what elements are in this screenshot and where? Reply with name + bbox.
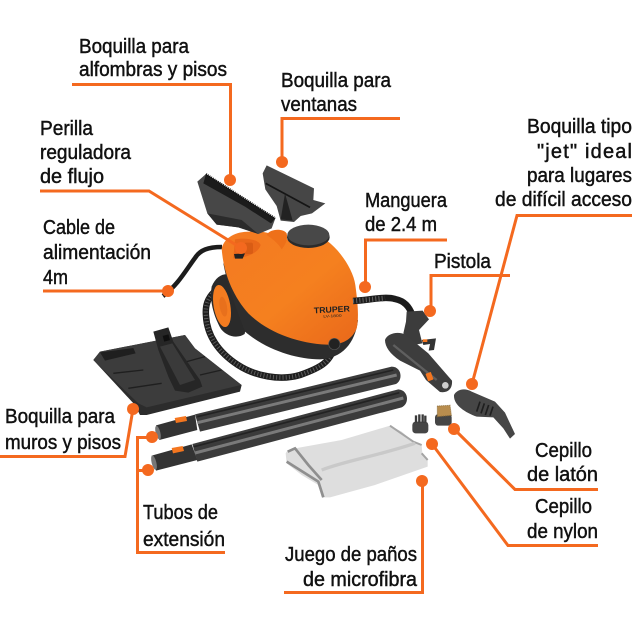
callout: extension tubes (138, 431, 225, 552)
brand label: LV-1800 (323, 314, 342, 319)
power cord (163, 247, 222, 296)
callout: carpet nozzle: alfombras y pisos (79, 59, 227, 81)
callout: power cord: Cable de (43, 217, 115, 239)
callout: microfiber cloths: Juego de paños (285, 544, 417, 566)
steam cleaner unit (163, 165, 412, 378)
callout: wall nozzle (0, 403, 139, 456)
callout: jet nozzle: para lugares (527, 165, 632, 187)
callout: extension tubes: extensión (143, 529, 225, 551)
extension tubes (150, 367, 407, 471)
nylon brush (412, 414, 428, 433)
callout: brass brush: Cepillo (535, 440, 592, 462)
hose outlet (329, 338, 340, 350)
callout: hose: Manguera (365, 190, 448, 212)
carpet nozzle (197, 174, 275, 234)
callout: nylon brush: de nylon (527, 521, 598, 543)
callout: nylon brush (426, 438, 598, 546)
water cap (287, 225, 330, 248)
base (223, 263, 358, 359)
callout: jet nozzle: Boquilla tipo (527, 116, 632, 138)
callout: window nozzle: ventanas (281, 94, 357, 116)
window nozzle (263, 165, 325, 222)
tube lower (150, 389, 407, 471)
callout: flow knob (40, 118, 247, 254)
orange body (222, 231, 358, 345)
callout: flow knob: de flujo (40, 166, 104, 188)
callout: wall nozzle: muros y pisos (5, 432, 121, 454)
regulator knob (233, 239, 261, 259)
shoulder shading (267, 230, 287, 249)
callout: microfiber cloths (284, 475, 428, 592)
callout: gun (424, 251, 510, 317)
callout: gun: Pistola (434, 251, 492, 273)
callout: window nozzle: Boquilla para (281, 70, 392, 92)
callout: flow knob: Perilla (40, 118, 94, 140)
callout: jet nozzle: "jet" ideal (537, 141, 632, 163)
callout: microfiber cloths: de microfibra (303, 569, 418, 591)
callout: brass brush (448, 423, 598, 490)
brand label: TRUPER (314, 303, 350, 315)
callout: jet nozzle (466, 116, 632, 390)
callout: jet nozzle: de difícil acceso (495, 189, 632, 211)
callout: brass brush: de latón (527, 464, 598, 486)
callout: power cord: alimentación (43, 242, 151, 264)
callout: window nozzle (276, 70, 400, 168)
handle (153, 327, 202, 393)
callout: power cord (43, 217, 174, 297)
brass brush (435, 405, 452, 426)
callout: carpet nozzle: Boquilla para (79, 36, 190, 58)
wheel (210, 274, 249, 337)
coiled hose (206, 292, 335, 378)
callout: power cord: 4m (43, 267, 68, 289)
microfiber cloths (286, 426, 428, 497)
callout: carpet nozzle (72, 36, 236, 186)
jet nozzle (454, 389, 515, 439)
spray gun (385, 311, 452, 392)
callout: wall nozzle: Boquilla para (5, 406, 116, 428)
callout: hose: de 2.4 m (365, 214, 437, 236)
callout: flow knob: reguladora (40, 142, 132, 164)
callout: extension tubes: Tubos de (143, 502, 218, 524)
tube upper (154, 367, 401, 440)
steam hose to gun (353, 298, 412, 314)
wall and floor nozzle (93, 327, 242, 415)
callout: hose (359, 190, 448, 293)
callout: nylon brush: Cepillo (535, 496, 592, 518)
